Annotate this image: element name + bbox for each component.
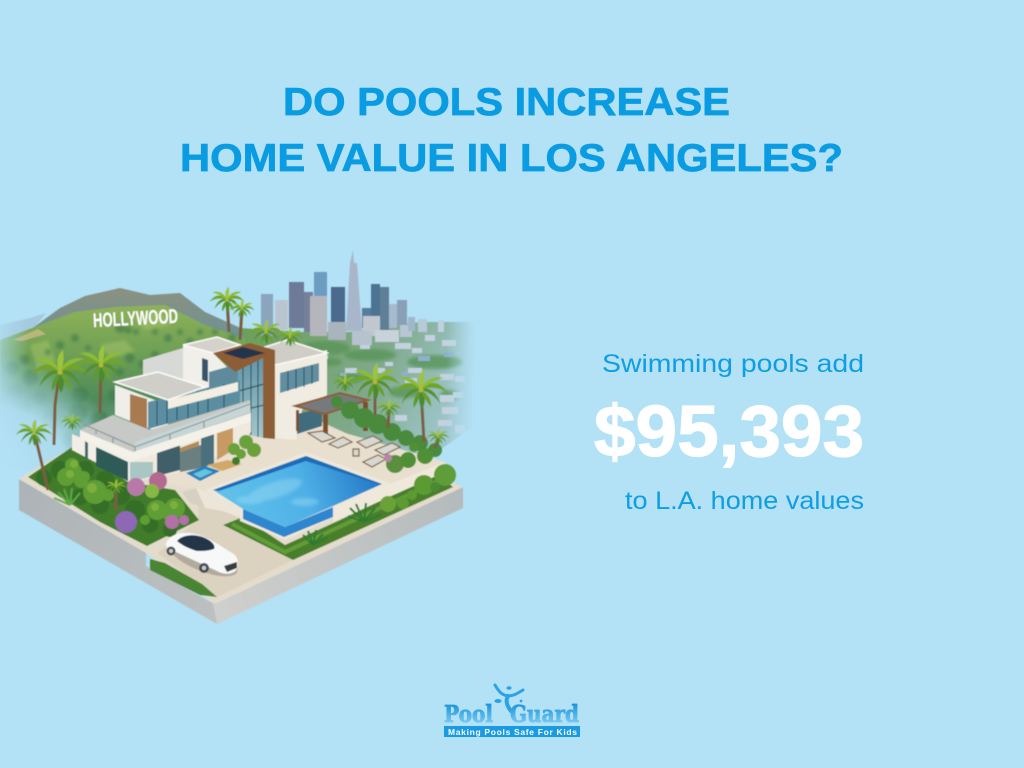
sunlit hillside patches [30, 314, 168, 368]
green hillside [0, 304, 248, 452]
distant blue ridge [1, 314, 46, 338]
left garden bed [28, 447, 199, 546]
title: DO POOLS INCREASE [283, 81, 730, 124]
callout lead-in: Swimming pools add [602, 350, 864, 378]
flowering tint at right beds [384, 454, 392, 462]
illustration: Los Angeles hillside home with pool [0, 250, 475, 624]
white sports car [164, 532, 242, 584]
glazing frames [157, 384, 224, 425]
shrubs and plants [36, 435, 456, 545]
hillside tree clumps [5, 323, 236, 450]
tower mullions [235, 358, 264, 437]
concrete platform [19, 412, 463, 624]
platform left face [19, 479, 217, 624]
left garden shrubs [57, 458, 185, 525]
balcony railing lines [83, 404, 250, 452]
skyline towers [261, 250, 444, 345]
palm trunks [35, 300, 438, 510]
ground floor windows left [96, 447, 128, 481]
upper white block [183, 345, 240, 392]
palm crowns [31, 350, 89, 393]
title: HOME VALUE IN LOS ANGELES? [180, 137, 843, 180]
sun loungers [308, 431, 400, 467]
main block fascia [168, 382, 238, 409]
sliding doors [157, 443, 180, 476]
upper block window [202, 358, 208, 382]
glass living room [130, 462, 153, 482]
logo tagline bar [444, 726, 580, 737]
pergola [295, 393, 368, 441]
pool deck [150, 420, 445, 512]
steps and pool coping [182, 488, 243, 519]
terrace hedges behind deck [331, 396, 442, 457]
logo tagline: Making Pools Safe For Kids [448, 727, 577, 737]
right wing wall [274, 350, 327, 440]
right wing window frames [288, 365, 312, 391]
distant neighbourhood trees and houses [300, 335, 465, 433]
Pool Guard logo [444, 685, 580, 737]
ground floor window glass [85, 441, 88, 460]
tower upper balcony glass [209, 364, 238, 392]
entry recess [180, 445, 201, 472]
glass tower [235, 355, 264, 438]
right wing roof [262, 340, 327, 365]
rear terrace wall [143, 348, 183, 385]
balcony floor [80, 400, 251, 452]
shrubs right of deck [380, 442, 456, 512]
lawn highlight [232, 480, 440, 552]
mountain behind the sign [34, 288, 244, 338]
swimming pool [205, 452, 392, 540]
callout follow-up: to L.A. home values [625, 487, 864, 515]
logo water splash icon [494, 685, 523, 711]
left garden dark underplanting [36, 461, 177, 537]
entry mat and hot tub [186, 460, 242, 481]
platform top base [19, 412, 463, 603]
shrubs by terrace [228, 435, 261, 465]
upper block roof [183, 337, 240, 353]
logo wordmark: Guard [510, 701, 579, 728]
right wing lower window [297, 408, 322, 434]
doors right [201, 432, 214, 468]
logo wordmark [444, 701, 579, 728]
title [180, 81, 843, 180]
left garden shrub highlights [66, 460, 178, 511]
front pool lawn [223, 474, 453, 560]
entry canopy wood [180, 441, 199, 452]
wood cladding lower [217, 424, 233, 460]
wood cladding panel [130, 394, 147, 432]
city ground with neighbourhoods [241, 322, 471, 454]
callout value: $95,393 [594, 392, 864, 472]
Hollywood sign: HOLLYWOOD [93, 306, 179, 332]
balcony slab edge [80, 413, 251, 461]
dry patch on hillside [13, 329, 46, 341]
fade of the hills into the background at lower left [0, 360, 102, 471]
infographic canvas [0, 88, 863, 737]
pool outer wall [243, 507, 333, 537]
main block glazing [148, 380, 240, 429]
platform right face [213, 487, 463, 624]
modern house [72, 337, 327, 482]
brown tower frame [213, 343, 275, 439]
front lawn strip [150, 559, 217, 597]
logo wordmark: Pool [444, 701, 493, 728]
ground floor right wall [133, 422, 251, 482]
main block roof [115, 372, 205, 400]
pool water [213, 456, 382, 527]
balcony glass rail [135, 402, 250, 452]
water highlights [236, 474, 319, 506]
solar roof panel [223, 347, 265, 359]
retaining wall by pool [333, 462, 445, 522]
palm trees [16, 287, 450, 510]
right wing window [280, 363, 319, 393]
backdrop: Hollywood hills and downtown skyline [0, 250, 475, 480]
pink flowering shrubs [115, 472, 189, 533]
driveway [157, 497, 293, 597]
green shrub at flower bed [145, 484, 159, 498]
statistic callout [594, 350, 864, 515]
pool coping [205, 452, 392, 540]
ground floor wall [72, 434, 133, 482]
inner tile edges [213, 456, 382, 491]
spiky plants along pool lawn [303, 503, 382, 545]
main block left wall [115, 385, 168, 436]
spiky garden plant [54, 488, 80, 505]
stairs to driveway [182, 488, 205, 508]
